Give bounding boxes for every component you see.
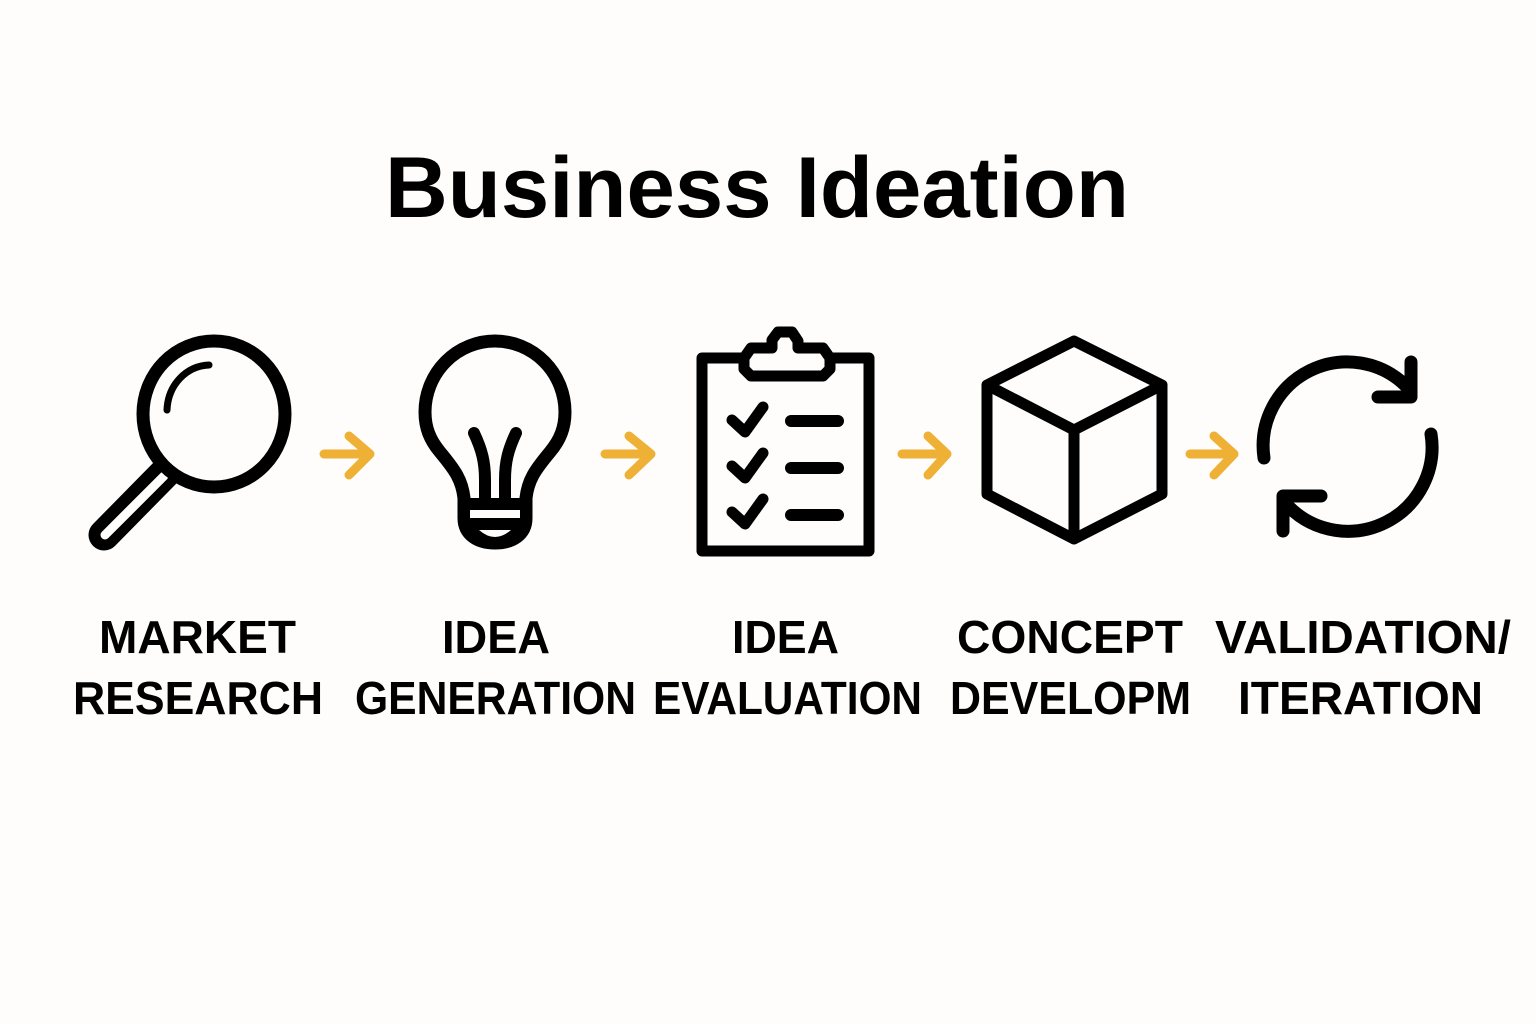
label: idea evaluation: IDEA <box>732 611 839 663</box>
label: idea generation: GENERATION <box>355 672 636 724</box>
label: validation iteration <box>1215 611 1511 724</box>
label: market research: RESEARCH <box>73 672 323 724</box>
arrow: idea generation to idea evaluation <box>605 436 651 475</box>
title: Business Ideation <box>385 140 1129 236</box>
label: idea generation: IDEA <box>442 611 550 663</box>
label: concept development: DEVELOPM <box>950 672 1191 724</box>
icon: cube <box>987 341 1162 539</box>
label: idea generation <box>355 611 636 724</box>
arrow: concept development to validation <box>1190 436 1234 475</box>
icon: clipboard checklist <box>702 332 869 551</box>
label: validation iteration: ITERATION <box>1238 672 1483 724</box>
label: validation iteration: VALIDATION/ <box>1215 611 1511 663</box>
icon: light bulb <box>425 341 565 543</box>
label: concept development <box>950 611 1191 724</box>
label: market research <box>73 611 323 724</box>
label: idea evaluation: EVALUATION <box>653 672 922 724</box>
label: concept development: CONCEPT <box>957 611 1183 663</box>
label: idea evaluation <box>653 611 922 724</box>
label: market research: MARKET <box>99 611 296 663</box>
icon: magnifying glass <box>104 341 285 535</box>
icon: refresh cycle <box>1263 362 1432 531</box>
arrow: idea evaluation to concept development <box>902 436 947 475</box>
arrow: market research to idea generation <box>324 436 370 475</box>
